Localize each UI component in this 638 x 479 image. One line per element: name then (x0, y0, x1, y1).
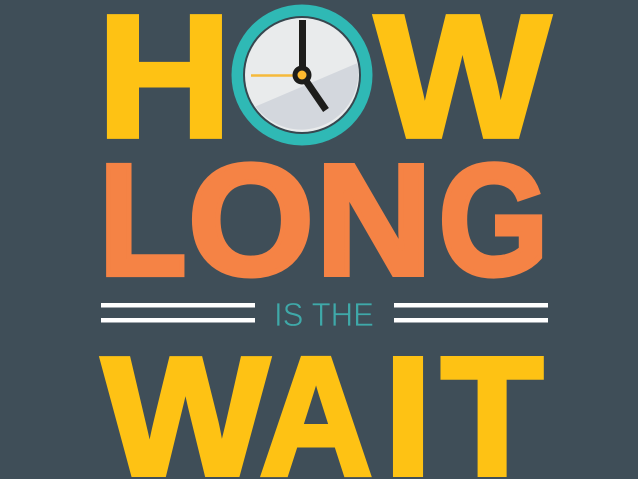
heading word: WAIT (102, 322, 543, 479)
heading word: HOW (97, 0, 550, 174)
heading word: LONG: O (188, 131, 314, 308)
heading word: LONG (99, 131, 549, 309)
heading word: LONG: G (438, 131, 549, 308)
heading word: LONG: N (316, 131, 432, 308)
icon: clock (232, 4, 372, 146)
subheading: IS THE: IS THE (274, 296, 374, 333)
left double rule (101, 303, 255, 322)
right double rule (394, 303, 548, 322)
heading word: LONG: L (99, 132, 187, 309)
